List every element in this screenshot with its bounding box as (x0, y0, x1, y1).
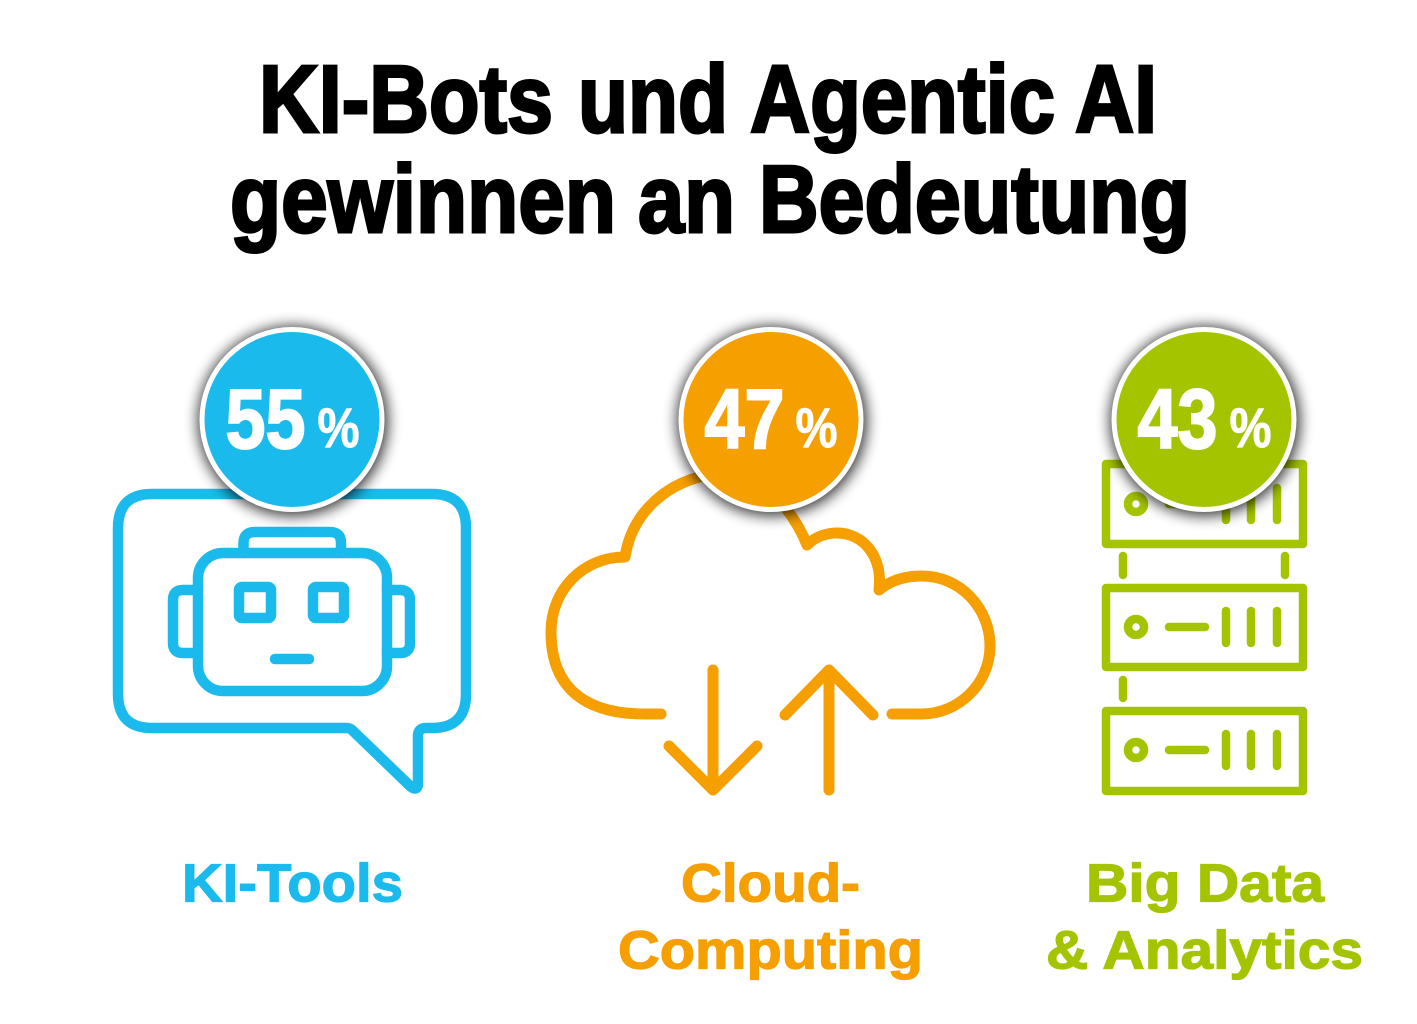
badge: 47 %: 47 (704, 372, 784, 466)
badge: 43 %: 43 (1138, 372, 1218, 466)
badge: 55 % (198, 326, 388, 516)
label: Big Data & Analytics: & Analytics (1046, 920, 1363, 980)
icon: robot in speech bubble (118, 494, 466, 788)
badge: 47 % (677, 326, 867, 516)
label: Big Data & Analytics: Big Data (1086, 854, 1325, 914)
icon: server racks (1106, 464, 1303, 791)
title: AI (1075, 46, 1157, 153)
label: KI-Tools: KI-Tools (182, 854, 403, 914)
badge: 43 %: % (1230, 396, 1272, 459)
badge: 47 %: % (796, 396, 838, 459)
title: und (578, 46, 728, 153)
title: KI-Bots (259, 46, 553, 153)
badge: 43 % (1110, 326, 1300, 516)
title: gewinnen (230, 146, 616, 253)
label: Cloud-Computing: Computing (618, 920, 923, 980)
label: Big Data & Analytics (1046, 854, 1363, 980)
title: an (638, 146, 735, 253)
icon: cloud with arrows (551, 474, 990, 790)
badge: 55 %: 55 (226, 372, 306, 466)
label: Cloud-Computing: Cloud- (681, 854, 860, 914)
title: Bedeutung (759, 146, 1190, 253)
label: Cloud-Computing (618, 854, 923, 980)
title (230, 46, 1190, 253)
badge: 55 %: % (318, 396, 360, 459)
title: Agentic (750, 46, 1055, 153)
